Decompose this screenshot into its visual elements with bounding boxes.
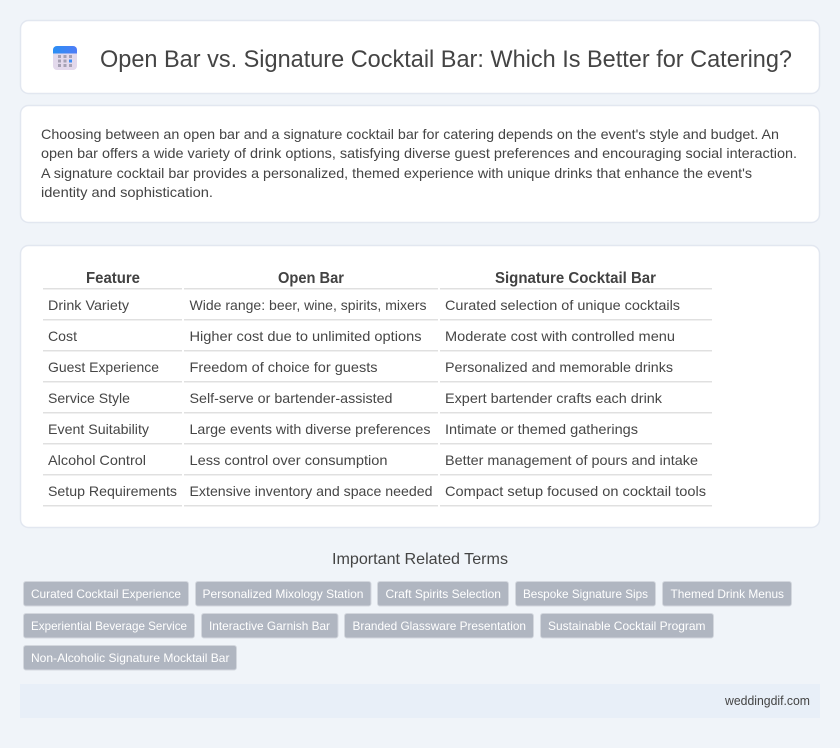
row: guest experience: Guest Experience — [48, 359, 159, 375]
intro paragraph — [41, 126, 797, 200]
row: setup requirements: Extensive inventory and space needed — [190, 483, 432, 499]
row: event suitability: Intimate or themed gatherings — [445, 421, 638, 437]
intro paragraph: A signature cocktail bar provides a personalized, themed experience with unique drinks that enhance the event's — [41, 165, 752, 181]
panel: introduction — [20, 106, 820, 222]
tag — [378, 582, 508, 606]
row: service style: Self-serve or bartender-assisted — [190, 390, 392, 406]
tag: Experiential Beverage Service — [31, 619, 187, 633]
row: alcohol control — [48, 452, 698, 468]
row: drink variety: Wide range: beer, wine, spirits, mixers — [190, 297, 426, 313]
row: setup requirements: Compact setup focused on cocktail tools — [445, 483, 706, 499]
tag: Interactive Garnish Bar — [209, 619, 330, 633]
table header: Open Bar — [278, 270, 344, 287]
row: cost: Higher cost due to unlimited options — [190, 328, 422, 344]
panel: comparison table — [20, 246, 820, 528]
header panel — [20, 20, 820, 94]
row: alcohol control: Less control over consumption — [190, 452, 388, 468]
title: Open Bar vs. Signature Cocktail Bar: Which Is Better for Catering? — [100, 46, 792, 73]
tag: Curated Cocktail Experience — [31, 587, 181, 601]
row: drink variety — [48, 297, 680, 313]
row: cost: Cost — [48, 328, 77, 344]
tag — [24, 646, 236, 670]
row: guest experience — [48, 359, 673, 375]
icon: calendar — [53, 46, 77, 70]
intro paragraph: open bar offers a wide variety of drink options, satisfying diverse guest preferences and encouraging social interaction. — [41, 145, 797, 161]
row: setup requirements — [48, 483, 706, 499]
tag — [540, 614, 714, 638]
tag — [24, 582, 188, 606]
row: cost: Moderate cost with controlled menu — [445, 328, 675, 344]
row: alcohol control: Alcohol Control — [48, 452, 146, 468]
tag: Bespoke Signature Sips — [523, 587, 648, 601]
tag: Branded Glassware Presentation — [352, 619, 526, 633]
row: drink variety: Curated selection of unique cocktails — [445, 297, 680, 313]
row: guest experience: Personalized and memorable drinks — [445, 359, 673, 375]
tag — [662, 582, 792, 606]
table header: Feature — [86, 270, 140, 287]
related terms heading: Important Related Terms — [332, 551, 508, 568]
row: guest experience: Freedom of choice for guests — [190, 359, 378, 375]
row: service style: Expert bartender crafts each drink — [445, 390, 663, 406]
intro paragraph: identity and sophistication. — [41, 184, 213, 200]
row: cost — [48, 328, 675, 344]
tag — [344, 614, 534, 638]
tag: Craft Spirits Selection — [386, 587, 501, 601]
row: service style — [48, 390, 663, 406]
intro paragraph: Choosing between an open bar and a signature cocktail bar for catering depends on the event's style and budget. An — [41, 126, 779, 142]
tag: Non-Alcoholic Signature Mocktail Bar — [31, 651, 229, 665]
tag — [24, 614, 194, 638]
related terms tags — [24, 582, 792, 670]
footer site name: weddingdif.com — [724, 694, 810, 708]
tag: Themed Drink Menus — [670, 587, 784, 601]
tag — [516, 582, 656, 606]
tag: Sustainable Cocktail Program — [548, 619, 706, 633]
row: service style: Service Style — [48, 390, 130, 406]
row: event suitability: Large events with diverse preferences — [190, 421, 430, 437]
table header — [86, 270, 656, 287]
row: drink variety: Drink Variety — [48, 297, 129, 313]
footer bar — [20, 684, 820, 718]
tag — [202, 614, 338, 638]
row: alcohol control: Better management of pours and intake — [445, 452, 698, 468]
table header: Signature Cocktail Bar — [495, 270, 656, 287]
row: event suitability — [48, 421, 638, 437]
row: event suitability: Event Suitability — [48, 421, 149, 437]
tag: Personalized Mixology Station — [202, 587, 364, 601]
tag — [196, 582, 371, 606]
row: setup requirements: Setup Requirements — [48, 483, 177, 499]
